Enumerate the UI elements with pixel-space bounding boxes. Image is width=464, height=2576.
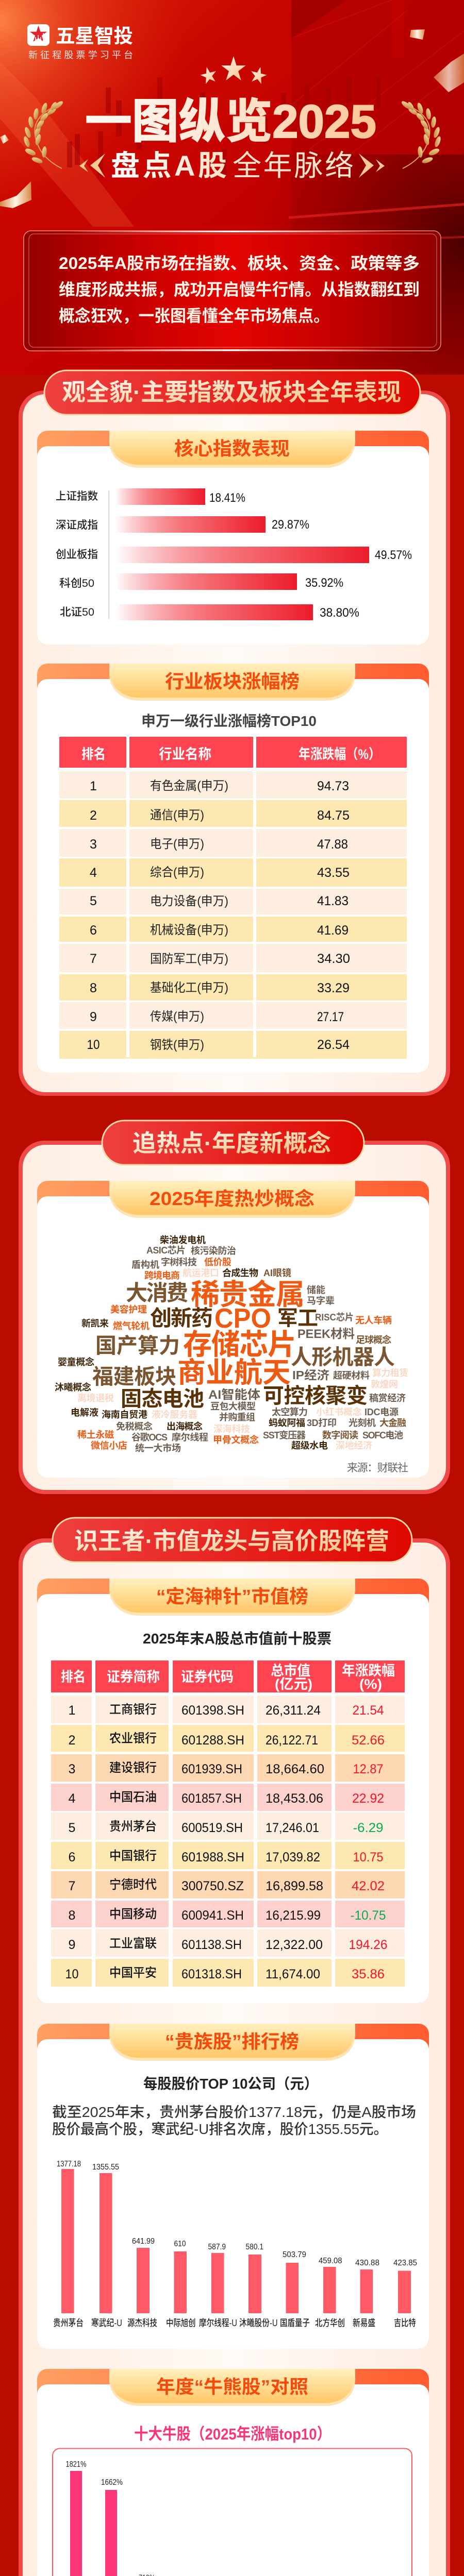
icon: right laurel bbox=[401, 100, 442, 168]
table: market cap top 10: 11,674.00 bbox=[266, 1967, 320, 1981]
section heading pill: 观全貌·主要指数及板块全年表现 bbox=[62, 379, 401, 405]
word cloud: IDC电源 bbox=[364, 1407, 399, 1417]
bar chart: share price top 10: 503.79 bbox=[283, 2250, 306, 2259]
word cloud: 固态电池 bbox=[121, 1387, 204, 1411]
word cloud: 超硬材料 bbox=[333, 1370, 370, 1381]
table: market cap top 10: 农业银行 bbox=[109, 1732, 157, 1745]
table: market cap top 10: 工商银行 bbox=[109, 1703, 157, 1717]
word cloud: 低价股 bbox=[204, 1257, 231, 1267]
bar chart: share price top 10: 摩尔线程-U bbox=[199, 2318, 237, 2328]
source note: 来源：财联社 bbox=[347, 1462, 408, 1474]
table: market cap top 10: 建设银行 bbox=[109, 1761, 157, 1775]
logo: 五星智投 bbox=[27, 24, 133, 60]
table: market cap top 10: 中国银行 bbox=[109, 1849, 157, 1863]
bar chart: core indices: 38.80% bbox=[320, 606, 359, 620]
bar chart: share price top 10: 430.88 bbox=[355, 2259, 379, 2267]
table: 申万一级行业涨幅榜: 84.75 bbox=[317, 808, 350, 823]
word cloud: 小红书概念 bbox=[316, 1406, 362, 1417]
table: market cap top 10: 601288.SH bbox=[181, 1733, 244, 1748]
hero background bbox=[0, 0, 464, 375]
card: 行业板块涨幅榜: 申万一级行业涨幅榜TOP10 bbox=[141, 713, 317, 729]
word cloud: 字树科技 bbox=[161, 1257, 197, 1267]
bar chart: share price top 10: 580.1 bbox=[245, 2243, 263, 2251]
table: market cap top 10: (亿元) bbox=[275, 1676, 312, 1692]
word cloud: 离境退税 bbox=[77, 1393, 114, 1403]
word cloud: 军工 bbox=[277, 1307, 318, 1330]
table: market cap top 10: 5 bbox=[69, 1821, 75, 1835]
word cloud: 谷歌OCS bbox=[131, 1432, 168, 1443]
description text: 截至2025年末，贵州茅台股价1377.18元，仍是A股市场 bbox=[52, 2104, 416, 2120]
card: 定海神针市值榜: 2025年末A股总市值前十股票 bbox=[143, 1631, 332, 1647]
word cloud: 足球概念 bbox=[356, 1334, 391, 1345]
table: market cap top 10: 26,122.71 bbox=[266, 1733, 318, 1748]
table: market cap top 10: 26,311.24 bbox=[266, 1703, 321, 1718]
word cloud: 燃气轮机 bbox=[113, 1321, 150, 1331]
table: 申万一级行业涨幅榜: 钢铁(申万) bbox=[150, 1038, 204, 1052]
word cloud: SOFC电池 bbox=[362, 1430, 403, 1440]
card: 贵族股排行榜: 每股股价TOP 10公司（元） bbox=[143, 2076, 318, 2092]
word cloud: 3D打印 bbox=[307, 1418, 337, 1428]
word cloud: 太空算力 bbox=[272, 1406, 308, 1417]
icon: logo mark bbox=[27, 24, 49, 46]
card: 核心指数表现: 核心指数表现 bbox=[174, 438, 290, 459]
word cloud: PEEK材料 bbox=[297, 1327, 355, 1341]
table: market cap top 10: 601138.SH bbox=[181, 1938, 242, 1952]
table: market cap top 10: 6 bbox=[69, 1850, 75, 1865]
word cloud: 合成生物 bbox=[222, 1267, 258, 1278]
word cloud: 大金融 bbox=[379, 1417, 406, 1428]
bar chart: core indices: 35.92% bbox=[305, 576, 343, 590]
card: 贵族股排行榜: “贵族股”排行榜 bbox=[165, 2031, 299, 2052]
table: market cap top 10: 年涨跌幅 bbox=[342, 1663, 395, 1679]
bar chart: core indices: 49.57% bbox=[375, 548, 412, 562]
bar chart: core indices: 29.87% bbox=[272, 518, 309, 532]
table: market cap top 10: 601318.SH bbox=[181, 1967, 242, 1981]
bar chart: share price top 10: 中际旭创 bbox=[166, 2318, 196, 2328]
table: 申万一级行业涨幅榜: 33.29 bbox=[317, 981, 350, 995]
table: 申万一级行业涨幅榜 bbox=[59, 737, 407, 1059]
icon: three stars bbox=[199, 56, 268, 85]
word cloud: 并购重组 bbox=[219, 1412, 255, 1422]
intro text box bbox=[24, 231, 441, 351]
table: 申万一级行业涨幅榜: 年涨跌幅（%） bbox=[299, 747, 380, 762]
word cloud: 柴油发电机 bbox=[160, 1234, 206, 1245]
title: 一图纵览2025 bbox=[85, 96, 376, 148]
table: 申万一级行业涨幅榜: 行业名称 bbox=[159, 747, 211, 762]
card: 年度牛熊股对照: 年度“牛熊股”对照 bbox=[156, 2376, 308, 2397]
word cloud: 核污染防治 bbox=[191, 1245, 236, 1256]
bar chart: share price top 10 bbox=[53, 2160, 417, 2328]
table: market cap top 10: 16,899.58 bbox=[266, 1879, 323, 1893]
word cloud: 稀土永磁 bbox=[77, 1430, 114, 1440]
description text bbox=[52, 2104, 416, 2137]
bar chart: share price top 10: 源杰科技 bbox=[127, 2318, 157, 2328]
table: 申万一级行业涨幅榜: 4 bbox=[90, 866, 97, 880]
table: market cap top 10: 1 bbox=[69, 1703, 75, 1718]
bar chart: core indices: 18.41% bbox=[209, 491, 245, 505]
table: market cap top 10: (%) bbox=[359, 1676, 382, 1692]
word cloud: 微信小店 bbox=[91, 1440, 127, 1451]
table: market cap top 10 bbox=[51, 1660, 405, 1987]
table: market cap top 10: 17,039.82 bbox=[266, 1850, 320, 1865]
word cloud: 国产算力 bbox=[95, 1334, 180, 1358]
word cloud: 电解液 bbox=[71, 1408, 98, 1418]
word cloud: 敦煌网 bbox=[371, 1379, 398, 1389]
table: market cap top 10: 601988.SH bbox=[181, 1850, 244, 1865]
word cloud: AI智能体 bbox=[208, 1388, 260, 1402]
word cloud: 海南自贸港 bbox=[102, 1410, 147, 1420]
section heading pill: 追热点·年度新概念 bbox=[132, 1130, 331, 1157]
table: market cap top 10: 证券代码 bbox=[181, 1669, 234, 1685]
word cloud: 甲骨文概念 bbox=[213, 1434, 259, 1445]
word cloud: 摩尔线程 bbox=[172, 1432, 208, 1443]
table: market cap top 10: 宁德时代 bbox=[109, 1878, 157, 1892]
word cloud: 出海概念 bbox=[167, 1421, 203, 1432]
card: 2025年度热炒概念: 2025年度热炒概念 bbox=[150, 1188, 314, 1209]
table: market cap top 10: 601398.SH bbox=[181, 1703, 244, 1718]
word cloud: 跨境电商 bbox=[144, 1270, 180, 1281]
table: market cap top 10: 7 bbox=[69, 1879, 75, 1893]
table: market cap top 10: 排名 bbox=[61, 1669, 86, 1685]
bar chart: share price top 10: 587.9 bbox=[208, 2243, 226, 2251]
table: 申万一级行业涨幅榜: 排名 bbox=[81, 747, 106, 762]
table: market cap top 10: 中国石油 bbox=[109, 1790, 157, 1804]
table: market cap top 10: 16,215.99 bbox=[266, 1908, 321, 1923]
table: 申万一级行业涨幅榜: 47.88 bbox=[317, 837, 348, 852]
icon: left chevrons bbox=[79, 154, 105, 178]
table: market cap top 10: 总市值 bbox=[271, 1663, 310, 1679]
table: market cap top 10: 12,322.00 bbox=[266, 1938, 323, 1952]
word cloud: 婴童概念 bbox=[58, 1357, 94, 1367]
card: 2025年度热炒概念 bbox=[37, 1181, 429, 1478]
table: 申万一级行业涨幅榜: 机械设备(申万) bbox=[150, 923, 228, 937]
table: 申万一级行业涨幅榜: 8 bbox=[90, 981, 97, 995]
word cloud: 液冷服务器 bbox=[152, 1410, 197, 1420]
word cloud: 稿赏经济 bbox=[369, 1393, 406, 1403]
bar chart: share price top 10: 吉比特 bbox=[394, 2318, 416, 2328]
bar chart: core indices: 深证成指 bbox=[56, 519, 98, 531]
card: 定海神针市值榜: “定海神针”市值榜 bbox=[156, 1586, 308, 1607]
bar chart: share price top 10: 国盾量子 bbox=[280, 2318, 310, 2328]
icon: left laurel bbox=[23, 100, 64, 168]
table: market cap top 10: 8 bbox=[69, 1908, 75, 1923]
table: market cap top 10: -10.75 bbox=[351, 1908, 386, 1923]
word cloud: 光刻机 bbox=[349, 1417, 376, 1428]
word cloud: 创新药 bbox=[150, 1306, 213, 1330]
table: market cap top 10: 4 bbox=[69, 1791, 76, 1806]
table: 申万一级行业涨幅榜: 43.55 bbox=[317, 866, 350, 880]
bar chart: core indices: 上证指数 bbox=[56, 490, 98, 502]
word cloud: 深海科技 bbox=[213, 1424, 250, 1434]
word cloud: 免税概念 bbox=[116, 1421, 153, 1432]
word cloud: SST变压器 bbox=[263, 1430, 306, 1440]
bar chart: top 10 bull stocks: 1662% bbox=[101, 2478, 123, 2487]
word cloud: 豆包大模型 bbox=[210, 1401, 256, 1412]
table: 申万一级行业涨幅榜: 通信(申万) bbox=[150, 808, 204, 822]
intro text box: 概念狂欢，一张图看懂全年市场焦点。 bbox=[59, 307, 329, 325]
panel: 追热点 bbox=[19, 1121, 450, 1494]
table: market cap top 10: 18,453.06 bbox=[266, 1791, 323, 1806]
table: 申万一级行业涨幅榜: 电子(申万) bbox=[150, 837, 204, 851]
table: market cap top 10: 52.66 bbox=[352, 1733, 385, 1748]
table: 申万一级行业涨幅榜: 41.69 bbox=[317, 923, 349, 938]
bar chart: share price top 10: 北方华创 bbox=[315, 2318, 345, 2328]
card: 行业板块涨幅榜 bbox=[37, 664, 429, 1073]
subtitle: 全年脉络 bbox=[233, 149, 354, 182]
table: 申万一级行业涨幅榜: 5 bbox=[90, 894, 97, 908]
card: 核心指数表现 bbox=[37, 431, 429, 645]
bar chart: share price top 10: 沐曦股份-U bbox=[239, 2318, 277, 2328]
word cloud: 商业航天 bbox=[177, 1357, 291, 1388]
table: market cap top 10: 中国移动 bbox=[109, 1907, 157, 1921]
table: market cap top 10: 17,246.01 bbox=[266, 1821, 319, 1835]
table: 申万一级行业涨幅榜: 41.83 bbox=[317, 894, 349, 908]
table: market cap top 10: 工业富联 bbox=[109, 1937, 157, 1951]
table: 申万一级行业涨幅榜: 2 bbox=[90, 808, 97, 823]
bar chart: core indices: 北证50 bbox=[60, 606, 94, 618]
table: 申万一级行业涨幅榜: 9 bbox=[90, 1010, 97, 1024]
bull chart heading: 十大牛股（2025年涨幅top10） bbox=[134, 2425, 331, 2443]
table: market cap top 10: 601939.SH bbox=[181, 1762, 242, 1776]
panel: 识王者 bbox=[19, 1518, 450, 2576]
table: market cap top 10: 194.26 bbox=[349, 1938, 388, 1952]
table: market cap top 10: 10 bbox=[65, 1967, 78, 1981]
table: 申万一级行业涨幅榜: 6 bbox=[90, 923, 97, 938]
table: market cap top 10: 600941.SH bbox=[181, 1908, 244, 1923]
subtitle bbox=[111, 149, 354, 182]
table: market cap top 10: 600519.SH bbox=[181, 1821, 243, 1835]
table: 申万一级行业涨幅榜: 27.17 bbox=[317, 1010, 344, 1024]
word cloud: 算力租赁 bbox=[372, 1367, 408, 1378]
intro text box: 2025年A股市场在指数、板块、资金、政策等多 bbox=[59, 254, 420, 273]
description text: 股价最高个股，寒武纪-U排名次席，股价1355.55元。 bbox=[52, 2121, 388, 2137]
word cloud: 美容护理 bbox=[110, 1304, 147, 1315]
word cloud: RISC芯片 bbox=[315, 1312, 354, 1323]
bar chart: share price top 10: 610 bbox=[174, 2240, 186, 2248]
table: 申万一级行业涨幅榜: 有色金属(申万) bbox=[150, 779, 228, 793]
bar chart: core indices: 科创50 bbox=[59, 578, 94, 589]
word cloud: 统一大市场 bbox=[135, 1443, 181, 1453]
bar chart: share price top 10: 1355.55 bbox=[92, 2163, 119, 2172]
table: 申万一级行业涨幅榜: 国防军工(申万) bbox=[150, 952, 228, 966]
table: 申万一级行业涨幅榜: 基础化工(申万) bbox=[150, 981, 228, 995]
table: 申万一级行业涨幅榜: 34.30 bbox=[317, 952, 350, 966]
table: market cap top 10: 22.92 bbox=[352, 1791, 384, 1806]
table: market cap top 10: 12.87 bbox=[353, 1762, 384, 1776]
table: market cap top 10: 中国平安 bbox=[109, 1966, 157, 1980]
table: 申万一级行业涨幅榜: 电力设备(申万) bbox=[150, 894, 228, 908]
word cloud: 深地经济 bbox=[336, 1440, 372, 1451]
table: 申万一级行业涨幅榜: 10 bbox=[87, 1038, 100, 1052]
card: 贵族股排行榜 bbox=[37, 2024, 429, 2349]
card: 定海神针市值榜 bbox=[37, 1579, 429, 2003]
word cloud: AI眼镜 bbox=[263, 1267, 291, 1278]
word cloud: 航运港口 bbox=[183, 1267, 219, 1278]
bar chart: top 10 bull stocks: 1821% bbox=[66, 2460, 87, 2469]
bar chart: share price top 10: 423.85 bbox=[393, 2259, 417, 2267]
table: market cap top 10: -6.29 bbox=[353, 1821, 384, 1835]
bar chart: share price top 10: 459.08 bbox=[319, 2257, 342, 2265]
table: market cap top 10: 21.54 bbox=[353, 1703, 384, 1718]
card: 年度牛熊股对照 bbox=[37, 2369, 429, 2576]
bar chart: core indices bbox=[56, 488, 412, 620]
word cloud: 超级水电 bbox=[291, 1440, 328, 1451]
icon: right chevrons bbox=[359, 154, 385, 178]
table: market cap top 10: 9 bbox=[69, 1938, 75, 1952]
word cloud: 无人车辆 bbox=[355, 1315, 392, 1326]
word cloud: 数字阅读 bbox=[322, 1430, 358, 1440]
word cloud: 福建板块 bbox=[92, 1365, 176, 1388]
bar chart: core indices: 创业板指 bbox=[56, 549, 98, 561]
bar chart: share price top 10: 641.99 bbox=[132, 2237, 155, 2246]
table: market cap top 10: 18,664.60 bbox=[266, 1762, 324, 1776]
word cloud: 蚂蚁阿福 bbox=[269, 1418, 305, 1428]
section heading pill bbox=[44, 370, 420, 415]
word cloud: ASIC芯片 bbox=[146, 1245, 186, 1256]
table: market cap top 10: 贵州茅台 bbox=[109, 1820, 157, 1834]
bar chart: share price top 10: 新易盛 bbox=[353, 2318, 375, 2328]
logo: 五星智投: 五星智投 bbox=[56, 26, 133, 47]
word cloud: CPO bbox=[214, 1303, 271, 1334]
bar chart: share price top 10: 寒武纪-U bbox=[91, 2318, 122, 2328]
card: 行业板块涨幅榜: 行业板块涨幅榜 bbox=[165, 671, 300, 692]
word cloud: 马字辈 bbox=[307, 1295, 335, 1306]
subtitle: 盘点A股 bbox=[111, 149, 227, 182]
table: market cap top 10: 2 bbox=[69, 1733, 75, 1748]
table: market cap top 10: 证券简称 bbox=[107, 1669, 160, 1685]
word cloud: 沐曦概念 bbox=[55, 1382, 91, 1393]
table: market cap top 10: 42.02 bbox=[352, 1879, 385, 1893]
bar chart: share price top 10: 1377.18 bbox=[57, 2160, 81, 2168]
bar chart: top 10 bull stocks bbox=[53, 2448, 412, 2576]
table: market cap top 10: 601857.SH bbox=[181, 1791, 242, 1806]
bar chart: share price top 10: 贵州茅台 bbox=[53, 2318, 84, 2328]
word cloud: 新凯来 bbox=[81, 1318, 109, 1329]
table: market cap top 10: 3 bbox=[69, 1762, 75, 1776]
gold confetti ribbons bbox=[0, 29, 464, 208]
intro text box: 维度形成共振，成功开启慢牛行情。从指数翻红到 bbox=[59, 280, 420, 299]
table: 申万一级行业涨幅榜: 26.54 bbox=[317, 1038, 350, 1052]
word cloud: 存储芯片 bbox=[183, 1328, 296, 1361]
word cloud: 大消费 bbox=[126, 1281, 188, 1305]
section heading pill bbox=[102, 1121, 364, 1165]
section heading pill bbox=[53, 1518, 412, 1562]
word cloud bbox=[55, 1234, 408, 1453]
word cloud: 可控核聚变 bbox=[263, 1384, 368, 1408]
word cloud: 储能 bbox=[307, 1285, 325, 1295]
word cloud: 稀贵金属 bbox=[191, 1278, 305, 1311]
table: 申万一级行业涨幅榜: 3 bbox=[90, 837, 97, 852]
table: market cap top 10: 35.86 bbox=[352, 1967, 385, 1981]
word cloud: 人形机器人 bbox=[291, 1345, 395, 1369]
word cloud: IP经济 bbox=[292, 1368, 329, 1382]
table: 申万一级行业涨幅榜: 传媒(申万) bbox=[150, 1010, 204, 1024]
word cloud: 盾构机 bbox=[131, 1260, 159, 1270]
logo: 五星智投: 新征程股票学习平台 bbox=[28, 50, 133, 60]
table: 申万一级行业涨幅榜: 94.73 bbox=[317, 779, 349, 793]
table: market cap top 10: 10.75 bbox=[353, 1850, 384, 1865]
table: 申万一级行业涨幅榜: 1 bbox=[90, 779, 97, 793]
table: 申万一级行业涨幅榜: 7 bbox=[90, 952, 97, 966]
table: market cap top 10: 300750.SZ bbox=[181, 1879, 244, 1893]
section heading pill: 识王者·市值龙头与高价股阵营 bbox=[74, 1528, 389, 1554]
panel: 观全貌 bbox=[19, 370, 450, 1096]
table: 申万一级行业涨幅榜: 综合(申万) bbox=[150, 866, 204, 879]
